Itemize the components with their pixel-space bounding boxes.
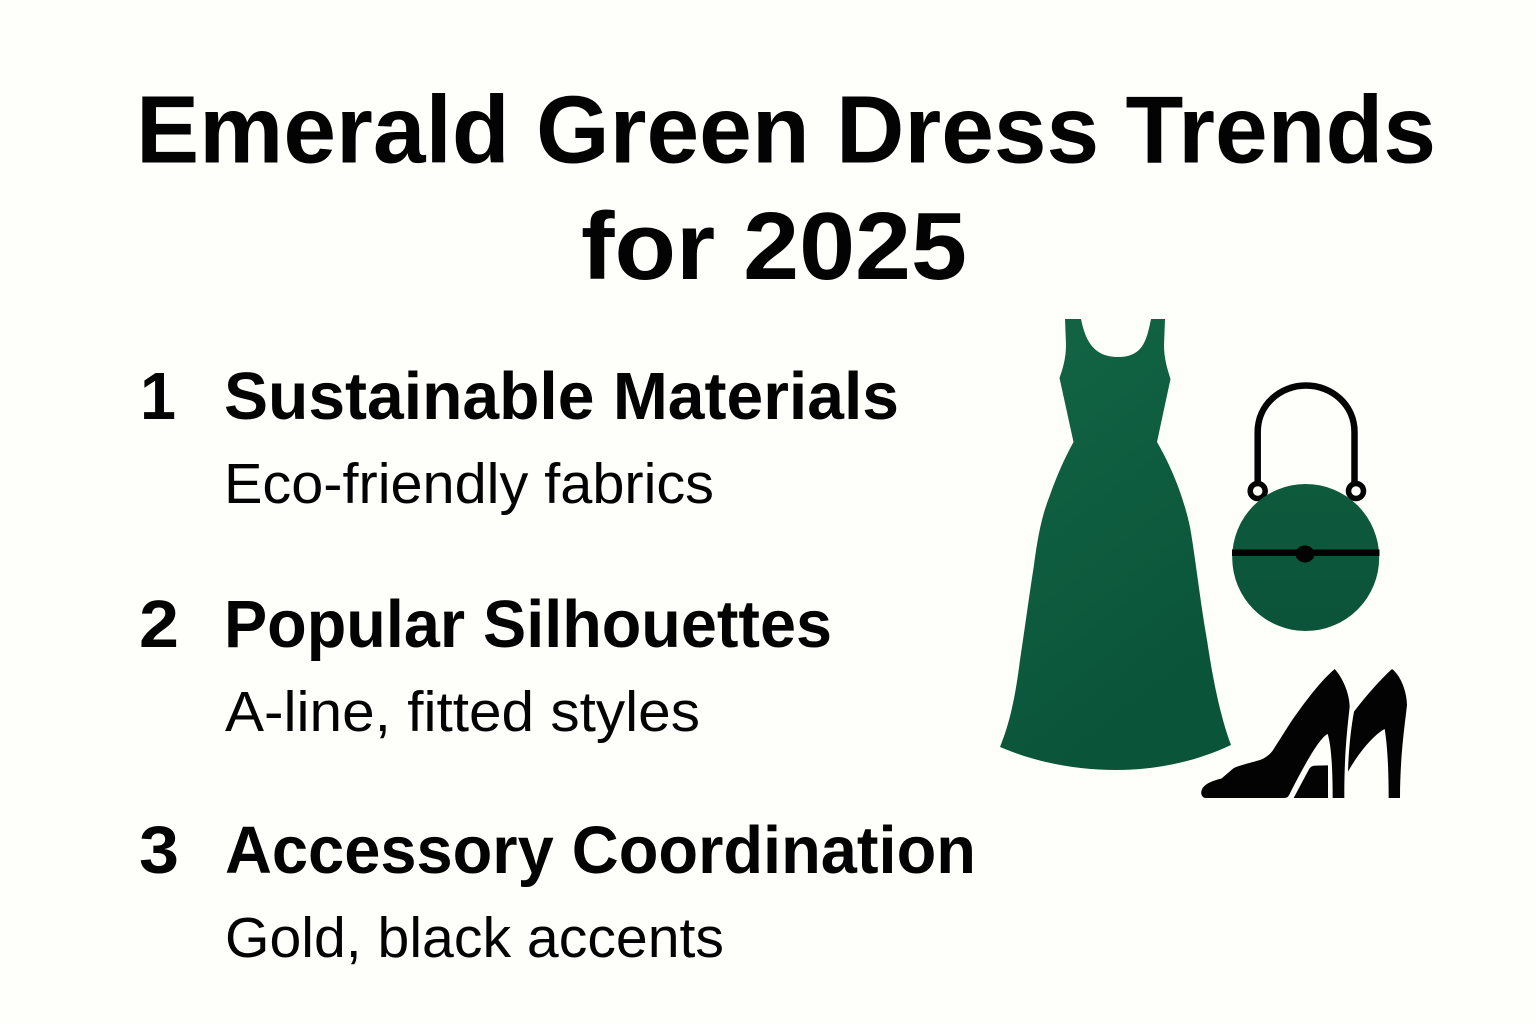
- left shoe insole: [1294, 765, 1328, 798]
- bag rings: [1250, 484, 1265, 498]
- bag strap: [1232, 550, 1380, 556]
- heading: accessory coordination: Accessory Coordination: [225, 813, 976, 888]
- title: [136, 76, 1436, 300]
- trend 3: accessory coordination: [139, 813, 976, 970]
- bag clasp: [1296, 546, 1314, 562]
- icon: handbag: [1232, 386, 1380, 631]
- number 3: 3: [139, 813, 179, 888]
- bag body: [1232, 484, 1379, 631]
- left shoe: [1201, 669, 1350, 798]
- heading: popular silhouettes: Popular Silhouettes: [224, 587, 832, 662]
- icon: high heels: [1201, 669, 1407, 798]
- right shoe: [1348, 669, 1407, 798]
- title: for 2025: [581, 193, 967, 300]
- icon: emerald dress: [1000, 319, 1231, 770]
- trend 2: popular silhouettes: [139, 587, 832, 744]
- description: gold, black accents: Gold, black accents: [225, 906, 724, 970]
- description: eco-friendly fabrics: Eco-friendly fabrics: [224, 452, 714, 516]
- number 2: 2: [139, 587, 179, 662]
- title: Emerald Green Dress Trends: [136, 76, 1436, 184]
- description: a-line, fitted styles: A-line, fitted styles: [225, 680, 700, 744]
- heading: sustainable materials: Sustainable Materials: [224, 359, 899, 434]
- number 1: 1: [140, 359, 176, 434]
- trend 1: sustainable materials: [140, 359, 899, 516]
- bag handle: [1258, 386, 1354, 484]
